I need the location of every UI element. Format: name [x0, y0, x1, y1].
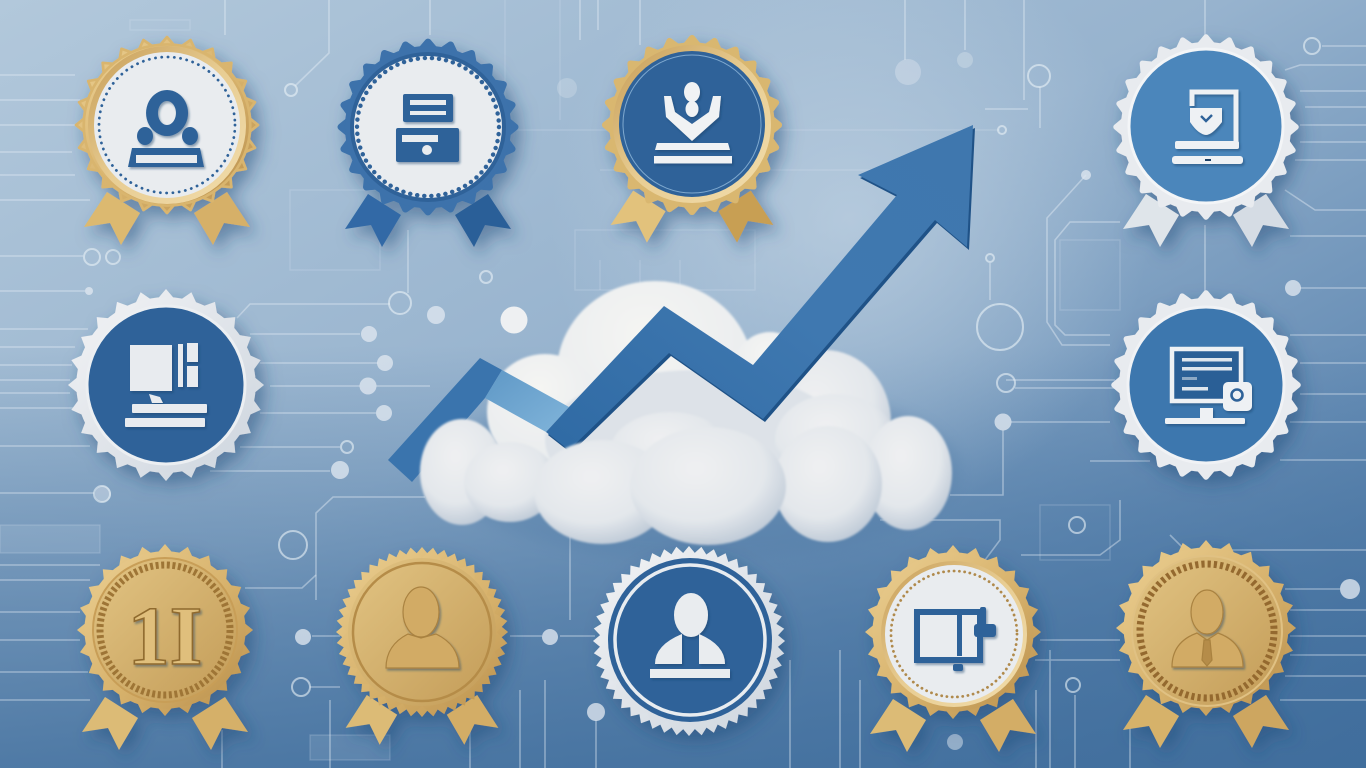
icon: desktop with tower — [125, 343, 207, 427]
badge 11: gold coin with suited person — [1116, 540, 1296, 748]
icon: monitor — [1165, 349, 1252, 424]
badge 7: gold rosette with 1I emblem — [77, 544, 253, 750]
face — [1128, 307, 1284, 463]
coin face — [1132, 556, 1282, 706]
icon: person — [650, 593, 730, 678]
icon: tablet and heart shield — [1172, 92, 1243, 164]
badge 6: white rosette, monitor with camera — [1114, 293, 1298, 477]
rim ring — [353, 563, 491, 701]
face — [1129, 49, 1283, 203]
badge 8: gold seal with person — [326, 537, 518, 745]
arrow side shadow — [548, 128, 975, 453]
icon: device — [917, 607, 996, 671]
face — [616, 48, 768, 200]
icon: figure with raised arms — [654, 82, 732, 164]
badge 9: white seal, blue face, person at desk — [581, 534, 797, 748]
face — [608, 558, 772, 722]
face — [87, 306, 245, 464]
icon: embossed person — [386, 587, 459, 668]
badge 4: white rosette, tablet with shield — [1116, 37, 1296, 247]
badge 3: gold rim blue face — [605, 38, 779, 243]
cloud front — [420, 412, 952, 545]
ring — [615, 565, 765, 715]
face — [91, 49, 243, 201]
badge 5: white rosette, computer icon — [68, 289, 264, 481]
arrow body — [546, 125, 973, 450]
icon: document stack — [396, 94, 459, 162]
reeded ring — [100, 565, 230, 695]
face — [883, 563, 1025, 705]
face — [352, 54, 504, 200]
thin ring — [623, 55, 761, 193]
circuit rings — [84, 38, 1320, 696]
dotted ring — [357, 58, 499, 196]
coin face — [93, 558, 237, 702]
badge 2: blue rosette with document icon — [341, 42, 515, 247]
rising arrow — [388, 125, 975, 482]
reeded ring — [1140, 564, 1274, 698]
shadow under cloud — [440, 380, 960, 560]
badge 1: gold rosette with person on podium — [76, 37, 258, 245]
cloud back — [487, 281, 895, 510]
dotted ring — [891, 571, 1017, 697]
light band — [485, 370, 569, 432]
badge 10: gold rosette with device icon — [865, 545, 1041, 752]
emblem text: 1I — [128, 590, 202, 683]
dotted ring — [99, 57, 235, 193]
floating white dot — [500, 306, 528, 334]
coin face — [348, 558, 496, 706]
icon: suited person — [1172, 590, 1243, 667]
icon: person on podium — [128, 90, 204, 167]
arrow tail — [388, 358, 502, 482]
